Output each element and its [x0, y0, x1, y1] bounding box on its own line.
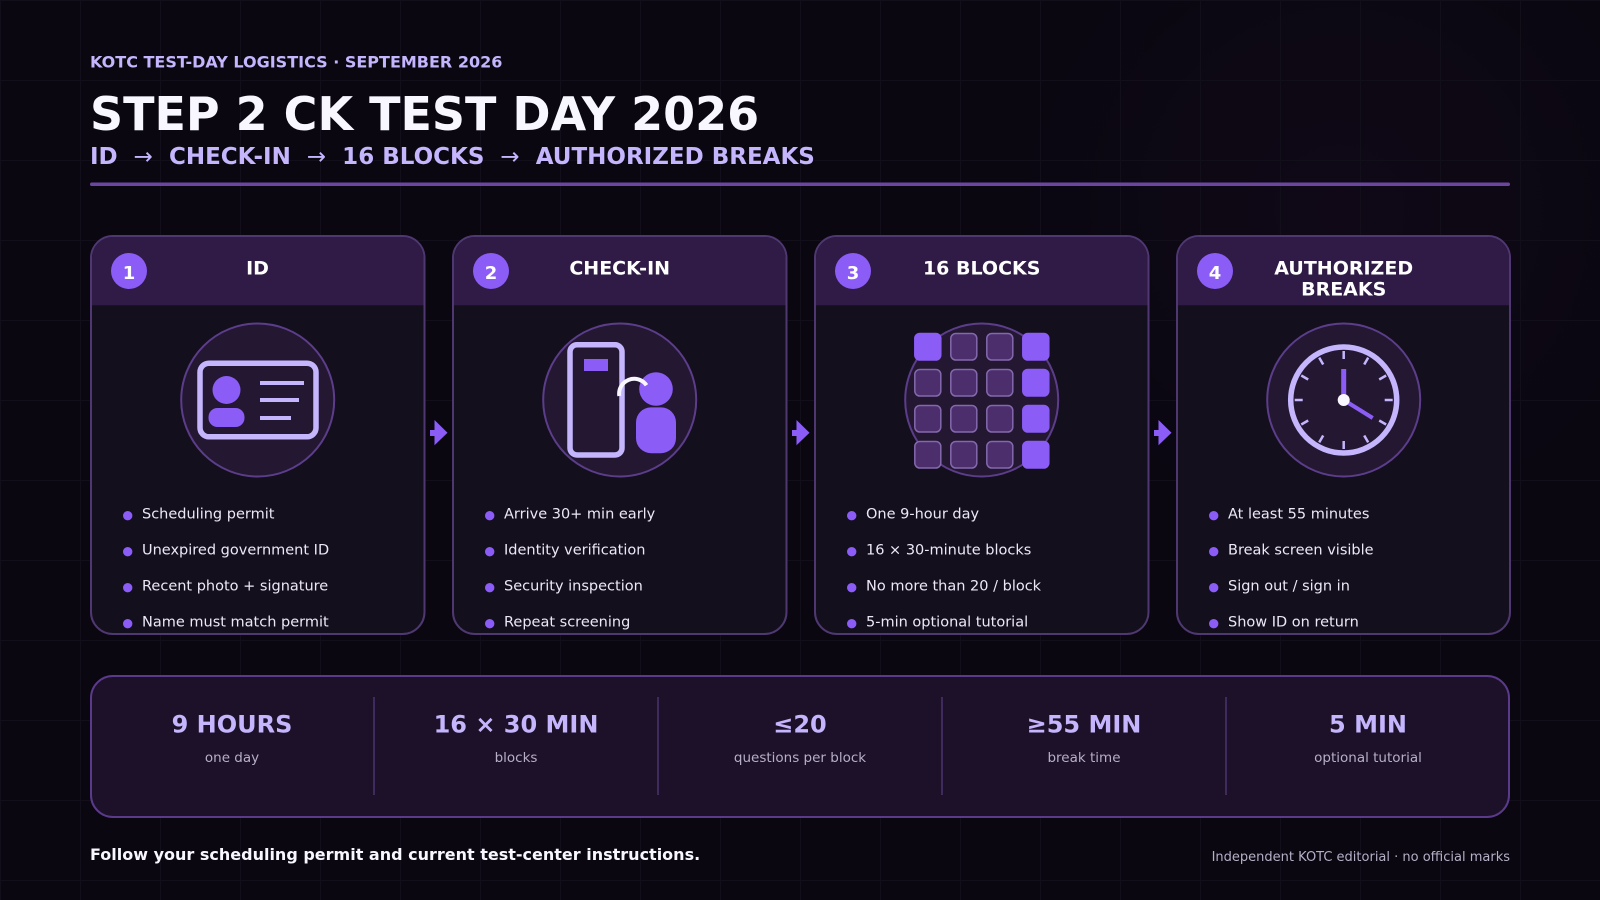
list: ID items: Scheduling permit [142, 506, 275, 522]
stat: 16 x 30 min [434, 710, 598, 766]
stat: 20 questions [734, 710, 866, 766]
list: check-in items [485, 506, 656, 630]
heading: ID: ID [246, 258, 269, 280]
panel: 16 blocks [815, 236, 1148, 634]
heading: 16 blocks: 16 BLOCKS [923, 258, 1040, 280]
stat: 20 questions: questions per block [734, 750, 866, 766]
stat: 16 x 30 min: blocks [495, 750, 537, 766]
list: 16 blocks items: 5-min optional tutorial [866, 614, 1028, 630]
heading: authorized breaks: AUTHORIZED [1274, 258, 1413, 280]
list: authorized breaks items: Sign out / sign in [1228, 578, 1350, 594]
list: authorized breaks items: Show ID on return [1228, 614, 1359, 630]
card header: ID [92, 237, 424, 305]
badge 4: 4 [1209, 263, 1221, 284]
stat: 9 hours: 9 HOURS [172, 710, 292, 738]
stat: 16 x 30 min: 16 × 30 MIN [434, 710, 598, 738]
list: authorized breaks items: At least 55 minutes [1228, 506, 1369, 522]
stat: 5 min tutorial: optional tutorial [1314, 750, 1422, 766]
panel: check-in [453, 236, 786, 634]
list: check-in items: Identity verification [504, 542, 645, 558]
stats panel [91, 676, 1509, 817]
list: authorized breaks items [1209, 506, 1374, 630]
subtitle: ID → CHECK-IN → 16 BLOCKS → AUTHORIZED BREAKS [90, 144, 815, 170]
stat: 5 min tutorial [1314, 710, 1422, 766]
heading: check-in: CHECK-IN [569, 258, 670, 280]
list: ID items: Unexpired government ID [142, 542, 329, 558]
stat: 55 min break [1027, 710, 1141, 766]
list: check-in items: Arrive 30+ min early [504, 506, 656, 522]
heading: authorized breaks: BREAKS [1301, 278, 1386, 300]
footer note: Follow your scheduling permit and current test-center instructions. [90, 845, 700, 864]
stat: 9 hours [172, 710, 292, 766]
badge 2: 2 [485, 263, 497, 284]
stat: 9 hours: one day [205, 750, 259, 766]
stat: 5 min tutorial: 5 MIN [1329, 710, 1407, 738]
stat: 55 min break: ≥55 MIN [1027, 710, 1141, 738]
arrow 3 [1154, 420, 1172, 445]
title: STEP 2 CK TEST DAY 2026 [90, 87, 759, 141]
badge 1 [111, 253, 147, 289]
badge 1: 1 [123, 263, 135, 284]
badge 3 [835, 253, 871, 289]
list: 16 blocks items [847, 506, 1042, 630]
icon: block grid [905, 324, 1058, 476]
list: check-in items: Security inspection [504, 578, 643, 594]
icon: door and person [543, 324, 696, 476]
list: 16 blocks items: 16 × 30-minute blocks [866, 542, 1031, 558]
list: 16 blocks items: One 9-hour day [866, 506, 980, 522]
panel: ID [91, 236, 424, 634]
card header: authorized breaks [1178, 237, 1509, 305]
list: ID items: Name must match permit [142, 614, 329, 630]
arrow 1 [430, 420, 448, 445]
card header: check-in [454, 237, 786, 305]
list: ID items: Recent photo + signature [142, 578, 328, 594]
list: check-in items: Repeat screening [504, 614, 630, 630]
stat: 20 questions: ≤20 [773, 710, 827, 738]
panel: authorized breaks [1177, 236, 1510, 634]
list: 16 blocks items: No more than 20 / block [866, 578, 1042, 594]
list: authorized breaks items: Break screen visible [1228, 542, 1374, 558]
arrow 2 [792, 420, 810, 445]
list: ID items [123, 506, 329, 630]
footer credit: Independent KOTC editorial · no official marks [1212, 850, 1510, 865]
icon: ID card [181, 324, 334, 476]
badge 2 [473, 253, 509, 289]
eyebrow: KOTC TEST-DAY LOGISTICS · SEPTEMBER 2026 [90, 52, 502, 72]
stat: 55 min break: break time [1047, 750, 1121, 766]
header rule [90, 182, 1510, 186]
icon: clock [1267, 324, 1420, 476]
card header: 16 blocks [816, 237, 1148, 305]
heading: authorized breaks [1274, 258, 1413, 300]
badge 4 [1197, 253, 1233, 289]
badge 3: 3 [847, 263, 859, 284]
